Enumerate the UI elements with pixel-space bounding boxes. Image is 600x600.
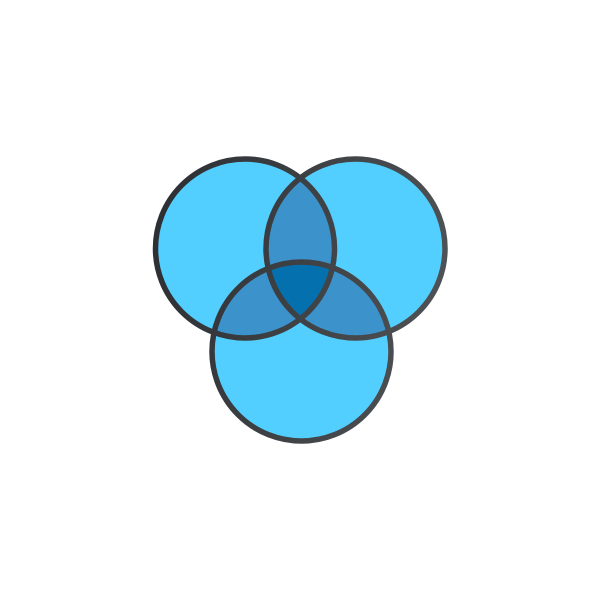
circle outlines (156, 159, 445, 441)
circle fill: right (266, 159, 445, 338)
venn diagram (152, 156, 448, 444)
overlap: left and right (268, 182, 332, 265)
circle fill: left (156, 159, 334, 338)
overlap: right and bottom (304, 271, 386, 336)
overlap: left and bottom (218, 272, 296, 336)
overlap: center of all three (272, 264, 329, 316)
circle fill: bottom (212, 262, 391, 441)
